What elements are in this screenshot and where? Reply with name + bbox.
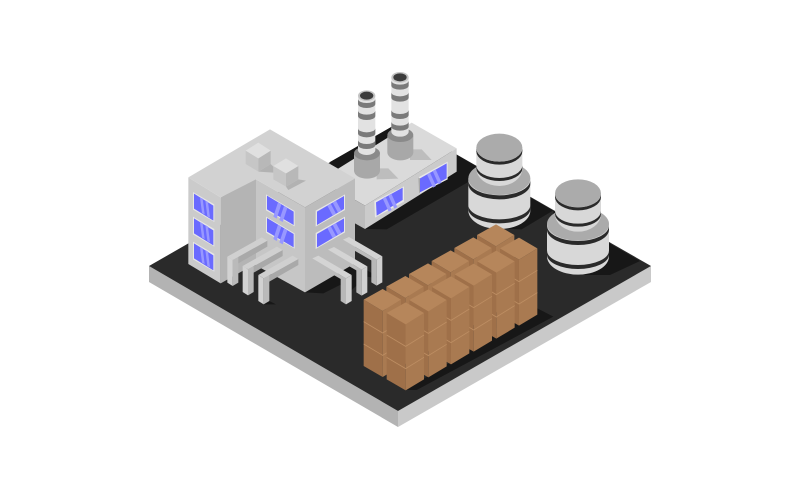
left column windows	[193, 192, 214, 272]
leg shadow	[263, 301, 276, 304]
right wall	[305, 178, 355, 292]
right wall windows	[316, 194, 345, 249]
chimney right	[387, 72, 413, 160]
factory right face	[365, 148, 457, 229]
roof box shadows	[258, 164, 306, 190]
platform base	[149, 122, 651, 427]
chimney shadows on roof	[377, 149, 432, 179]
main building	[188, 129, 382, 304]
factory roof	[320, 123, 457, 206]
roof	[188, 129, 355, 207]
storage tank 1	[468, 134, 530, 229]
factory left face	[355, 200, 365, 229]
left pipes	[227, 237, 298, 304]
right pipes	[312, 237, 382, 304]
ground shadows	[330, 122, 640, 275]
notch face	[221, 177, 256, 283]
centre wall windows	[266, 194, 295, 249]
factory window right	[418, 162, 448, 194]
box shadow	[406, 308, 553, 390]
factory window left	[374, 186, 404, 218]
centre wall	[256, 179, 305, 292]
roof box 1	[246, 143, 271, 172]
storage tank 2	[547, 179, 609, 275]
roof box 2	[273, 158, 298, 187]
chimney left	[354, 90, 380, 179]
stacked cardboard boxes	[364, 224, 537, 390]
building shadow	[305, 263, 382, 293]
column left face	[188, 177, 221, 283]
factory hall with chimneys	[320, 72, 457, 229]
